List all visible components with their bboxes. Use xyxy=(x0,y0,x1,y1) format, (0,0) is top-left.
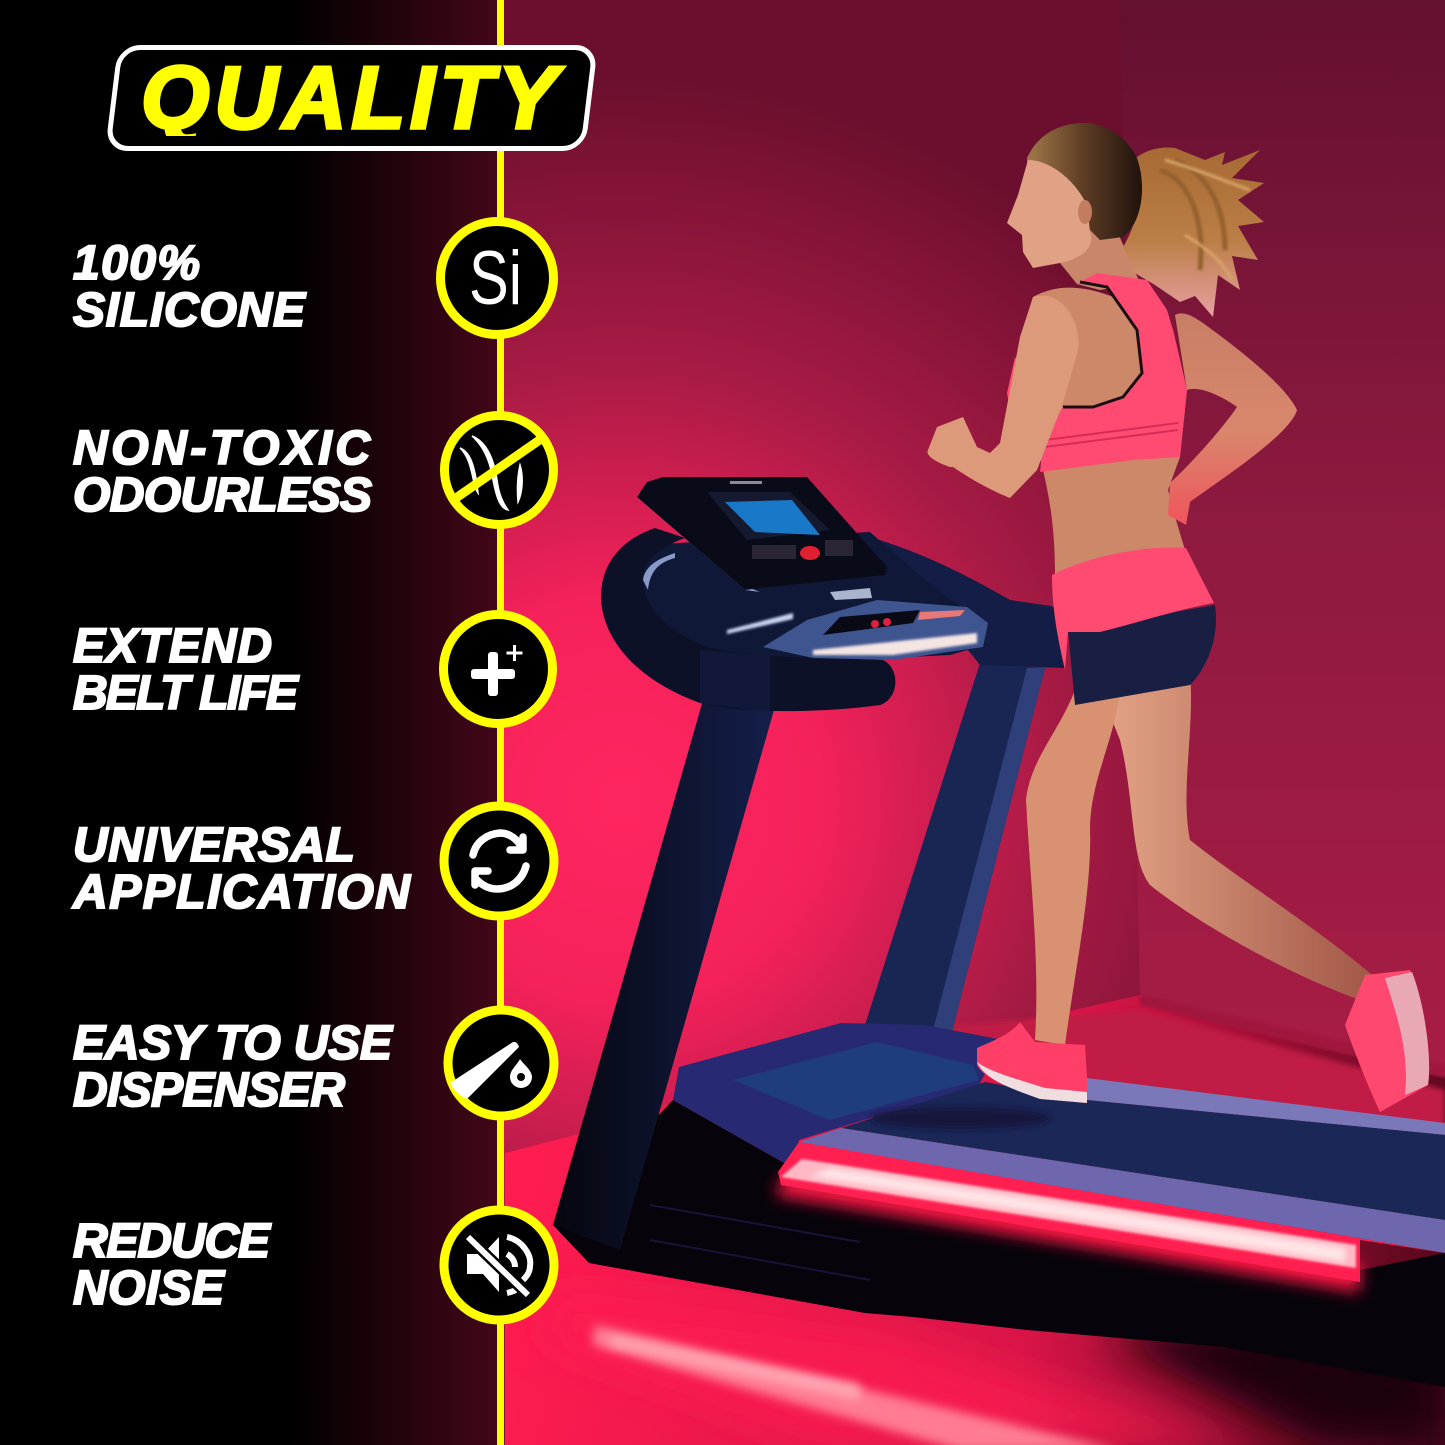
rear upright xyxy=(865,663,1045,1032)
icon: silicon symbol xyxy=(440,222,554,334)
ear xyxy=(1078,200,1092,224)
torso xyxy=(1020,288,1188,575)
console body xyxy=(632,532,985,662)
shorts xyxy=(1052,547,1216,705)
feature: universal application: APPLICATION xyxy=(72,866,411,919)
feature: extend belt life: BELT LIFE xyxy=(73,667,300,720)
shoes xyxy=(977,970,1429,1112)
sports top xyxy=(1007,273,1187,472)
left dark panel xyxy=(0,0,500,1445)
near rail xyxy=(799,1128,1445,1253)
yellow vertical divider xyxy=(497,0,504,1445)
head hair xyxy=(1027,123,1142,240)
back leg xyxy=(1100,670,1372,1000)
feature: 100% silicone xyxy=(73,237,307,337)
running belt xyxy=(841,1082,1445,1220)
feature: 100% silicone: 100% xyxy=(73,237,200,290)
title badge: QUALITY: QUALITY xyxy=(141,48,564,147)
handle chrome and light xyxy=(643,553,988,660)
treadmill xyxy=(553,477,1445,1387)
front upright xyxy=(553,700,774,1250)
console screen panel xyxy=(637,477,887,592)
feature: extend belt life xyxy=(73,620,300,720)
deck end cap xyxy=(673,1023,1003,1168)
front arm xyxy=(927,295,1078,498)
pink light strip xyxy=(775,1142,1445,1292)
neck xyxy=(1040,215,1140,290)
feature: non-toxic odourless xyxy=(73,422,372,522)
icon: dispenser nozzle and drop xyxy=(448,1010,554,1116)
feature: reduce noise xyxy=(73,1215,272,1315)
ponytail xyxy=(1123,148,1264,317)
feature: universal application xyxy=(72,819,411,919)
handlebar loop xyxy=(601,528,895,711)
lower frame and base xyxy=(553,1100,1445,1387)
back arm xyxy=(1168,313,1297,525)
deck front plate xyxy=(733,1042,979,1120)
icon: no odour xyxy=(444,416,554,524)
feature: easy to use dispenser: DISPENSER xyxy=(73,1064,345,1117)
feature: universal application: UNIVERSAL xyxy=(73,819,355,872)
feature: easy to use dispenser xyxy=(73,1017,394,1117)
feature: easy to use dispenser: EASY TO USE xyxy=(73,1017,394,1070)
feature: reduce noise: REDUCE xyxy=(73,1215,272,1268)
photo: runner on treadmill xyxy=(500,0,1445,1445)
tower and rear arm xyxy=(870,537,1065,668)
feature: reduce noise: NOISE xyxy=(73,1262,226,1315)
icon: refresh arrows xyxy=(444,806,554,916)
far rail xyxy=(1087,1078,1445,1135)
face xyxy=(1007,160,1091,268)
room background xyxy=(500,0,1445,1445)
front leg xyxy=(1026,690,1120,1045)
feature: extend belt life: EXTEND xyxy=(73,620,272,673)
icon: muted speaker xyxy=(444,1210,554,1320)
icon: plus xyxy=(444,614,552,724)
feature: non-toxic odourless: NON-TOXIC xyxy=(73,422,371,475)
feature: 100% silicone: SILICONE xyxy=(73,284,307,337)
runner xyxy=(927,123,1429,1112)
floor glow reflection xyxy=(540,1290,1445,1445)
feature: non-toxic odourless: ODOURLESS xyxy=(73,469,372,522)
icon: silicon symbol: Si xyxy=(469,236,522,321)
